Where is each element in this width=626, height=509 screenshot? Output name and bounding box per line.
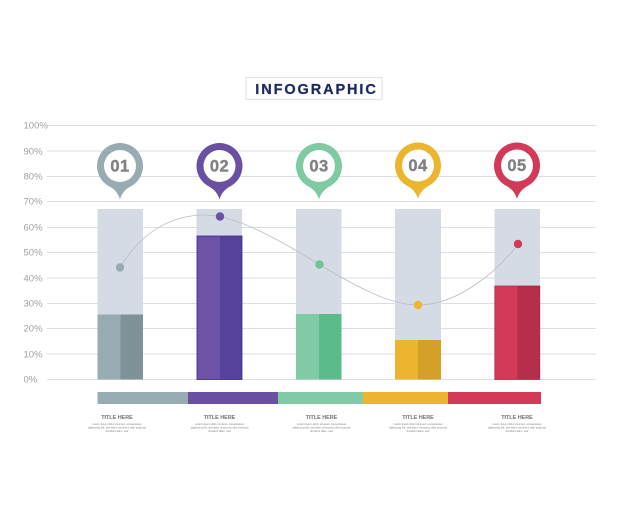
bar 04 [395,209,441,380]
y axis labels: 10% [24,350,43,360]
y axis labels: 0% [24,374,38,386]
y axis labels [24,120,48,386]
y axis labels: 70% [24,196,43,208]
y axis labels: 90% [24,146,43,158]
pin 05 [494,142,540,199]
caption 01 [88,415,146,433]
y axis labels: 100% [24,120,48,132]
bar 03 [296,209,342,380]
pin 04 [395,142,441,199]
caption 05: TITLE HERE [501,415,533,421]
caption 04: Lorem ipsum dolor sit amet, consectetuer [393,422,443,426]
caption 03 [293,415,351,433]
caption 04 [389,415,447,433]
pin 02: 02 [210,158,229,176]
caption 05: Lorem ipsum dolor sit amet, consectetuer [492,422,542,426]
caption 01: TITLE HERE [101,415,133,421]
caption 04: adipiscing elit, sed diam nonummy nibh euismod [389,425,447,429]
caption 05: tincidunt diam. sed [506,429,529,433]
pin 01 [97,143,143,200]
y axis labels: 20% [24,324,43,334]
y axis labels: 60% [24,222,43,234]
caption 03: tincidunt diam. sed [310,429,333,433]
bar 02 [196,209,242,380]
caption 01: Lorem ipsum dolor sit amet, consectetuer [92,422,142,426]
caption 02: tincidunt diam. sed [208,429,231,433]
caption 01: tincidunt diam. sed [106,429,129,433]
caption 02: adipiscing elit, sed diam nonummy nibh euismod [191,425,249,429]
pin 05: 05 [507,157,527,175]
bar 05 [494,209,540,380]
data points [116,212,522,309]
y axis labels: 30% [24,298,43,310]
trend line [120,215,518,305]
bar 01 [98,209,143,380]
pin 03: 03 [309,158,329,176]
caption 03: TITLE HERE [306,415,338,421]
caption 03: adipiscing elit, sed diam nonummy nibh euismod [293,425,351,429]
caption 01: adipiscing elit, sed diam nonummy nibh euismod [88,425,146,429]
pin 02 [196,143,242,200]
y axis labels: 50% [24,248,43,258]
bottom segmented bar [98,392,541,404]
caption 02 [191,415,249,433]
caption 03: Lorem ipsum dolor sit amet, consectetuer [297,422,346,426]
caption 04: TITLE HERE [402,415,434,421]
caption 05 [488,415,546,433]
caption 02: Lorem ipsum dolor sit amet, consectetuer [195,422,244,426]
y axis labels: 80% [24,172,43,182]
caption 04: tincidunt diam. sed [407,429,430,433]
title [246,78,382,100]
y axis labels: 40% [24,274,43,284]
caption 02: TITLE HERE [204,415,236,421]
title: INFOGRAPHIC [255,82,378,98]
pin 01: 01 [110,158,130,176]
caption 05: adipiscing elit, sed diam nonummy nibh euismod [488,425,546,429]
pin 04: 04 [408,157,428,175]
pin 03 [296,143,342,200]
